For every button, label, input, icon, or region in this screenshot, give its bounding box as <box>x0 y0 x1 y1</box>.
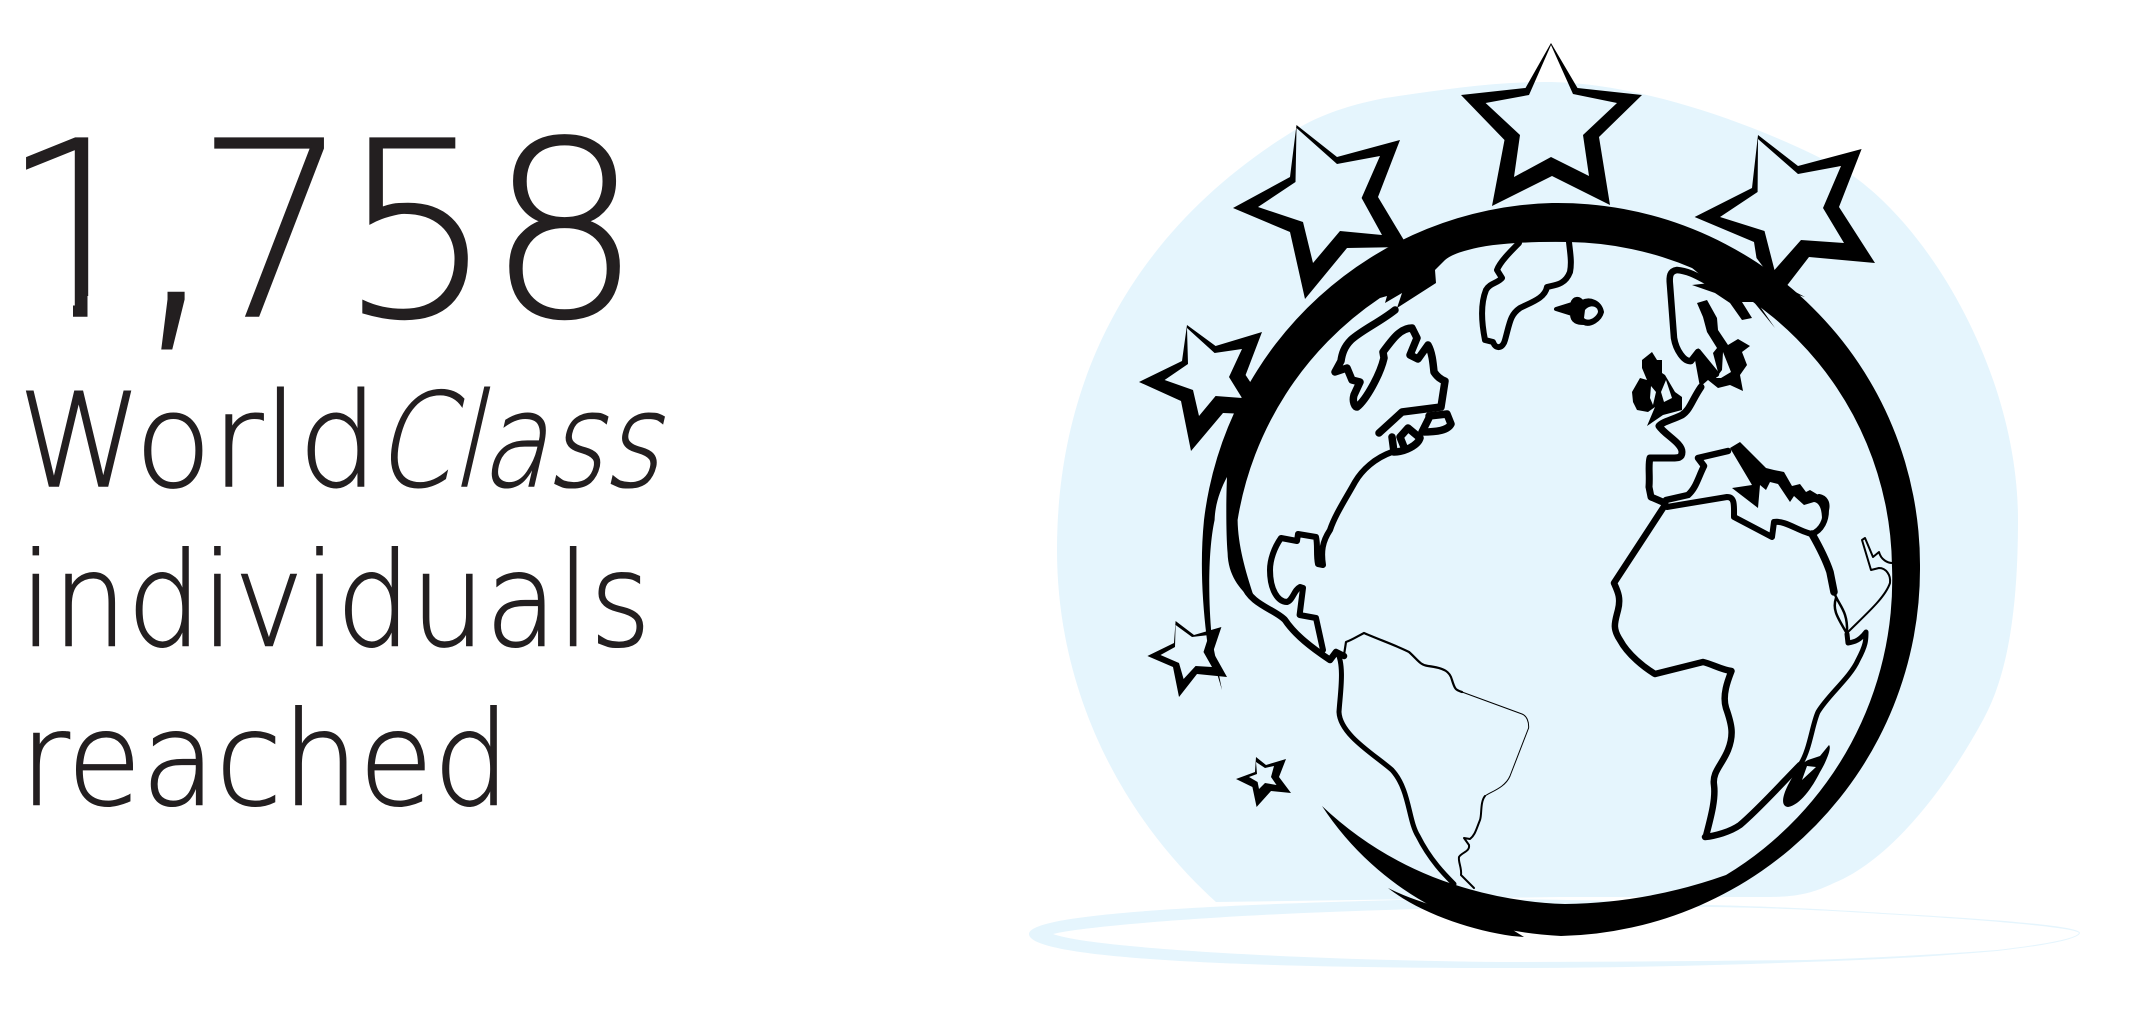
continent: Africa <box>1614 505 1800 837</box>
headline number: 7 <box>195 90 350 374</box>
star: small lower left <box>1147 621 1227 697</box>
ring: torn edge top right <box>1685 262 1805 328</box>
continent: northern Canada <box>1335 310 1445 433</box>
star: top centre <box>1461 43 1642 206</box>
continent: Britain and Ireland <box>1632 352 1682 426</box>
headline number: 1 <box>0 90 155 374</box>
headline number: 8 <box>487 90 642 374</box>
continent: Greenland <box>1482 242 1571 347</box>
star: upper left <box>1233 125 1408 299</box>
globe ring <box>1202 203 1920 936</box>
continent: Scandinavia <box>1670 270 1716 374</box>
headline number: 5 <box>339 90 494 374</box>
continent: Turkey coast <box>1666 451 1728 500</box>
continent: Iceland <box>1556 299 1602 324</box>
continent: Arabia <box>1847 538 1892 633</box>
continent: North Africa to Red Sea <box>1667 497 1827 537</box>
continents <box>1244 242 1892 888</box>
continent: Central America <box>1244 585 1344 660</box>
text: WorldClass: Class <box>367 367 687 518</box>
continent: Hudson and eastern coast <box>1392 414 1451 452</box>
continent: Western Europe coast <box>1649 387 1701 503</box>
text: WorldClass: World <box>18 365 378 517</box>
star: left <box>1139 325 1272 451</box>
star: upper right <box>1695 135 1875 292</box>
illustration: globe with stars <box>1029 43 2080 968</box>
text: WorldClass <box>18 365 687 518</box>
ring: lower sliver <box>1388 888 1524 937</box>
star: tiny <box>1236 757 1291 807</box>
continent: South America east coast <box>1344 633 1462 692</box>
text: individuals: individuals <box>20 524 651 676</box>
continent: South America west coast <box>1337 652 1454 884</box>
continent: Red Sea coast <box>1812 534 1834 592</box>
text: reached: reached <box>20 684 510 836</box>
headline number: , <box>126 19 226 387</box>
continent: North America east coast <box>1270 452 1392 650</box>
island: Madagascar <box>1783 745 1830 807</box>
base shadow ring <box>1029 899 2080 968</box>
background blob <box>1057 82 2018 902</box>
